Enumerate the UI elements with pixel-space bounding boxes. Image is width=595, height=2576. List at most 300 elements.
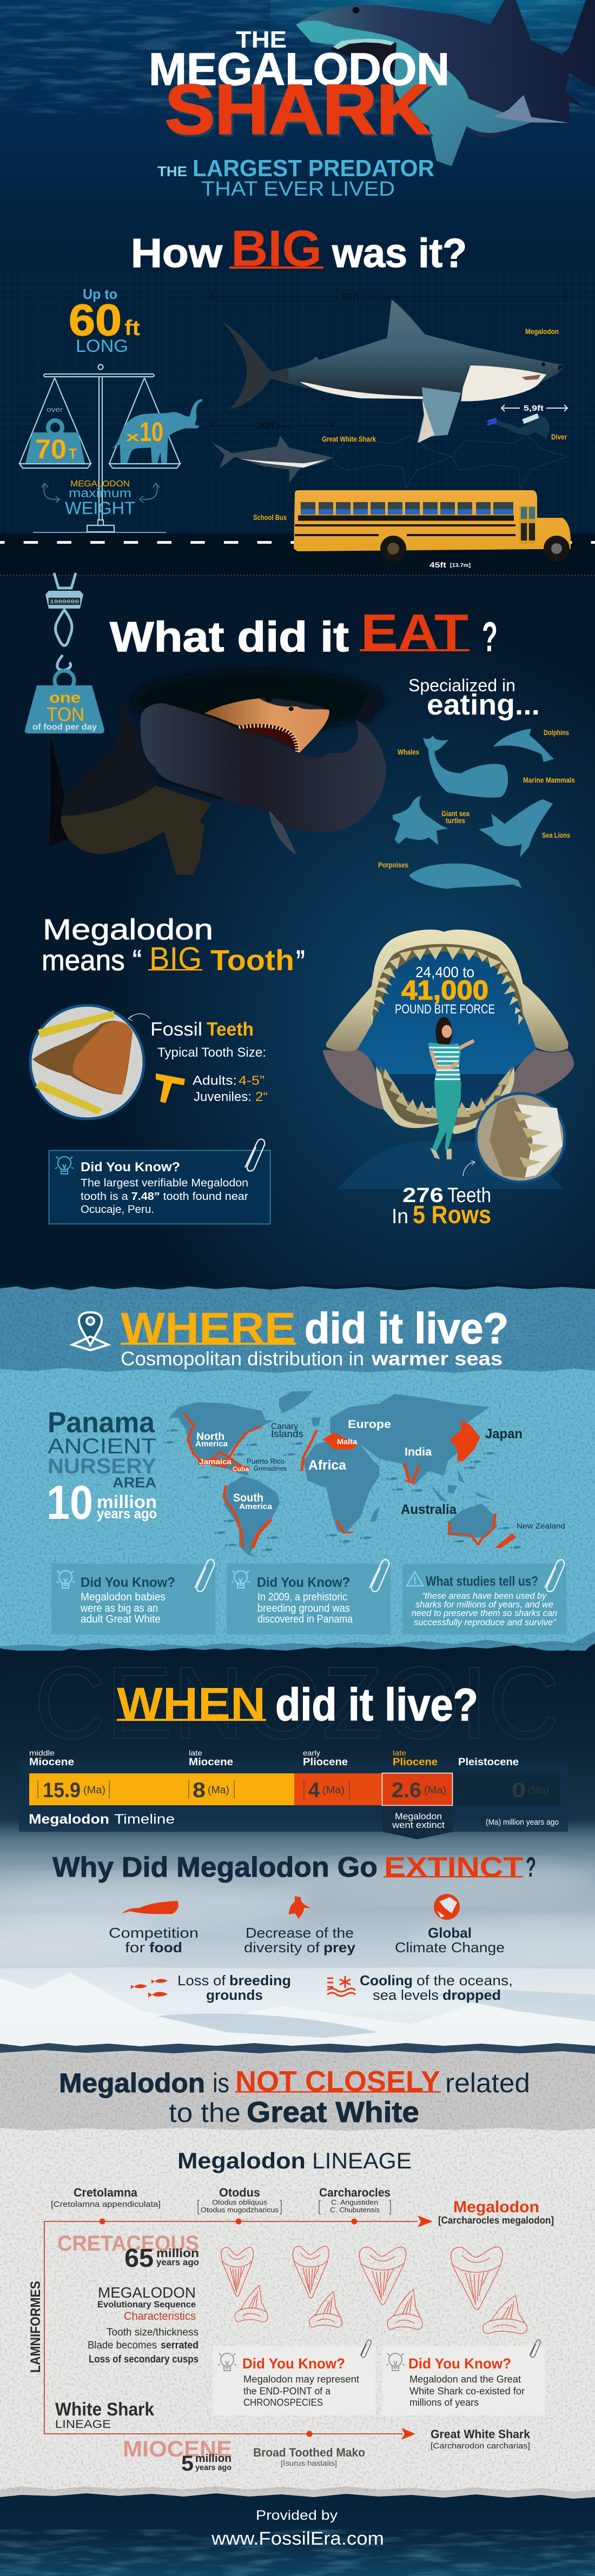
heading: not closely related: to the: [169, 2098, 241, 2128]
text: lineage species: Great White Shark: [431, 2427, 531, 2441]
text: panama ancient nursery area: AREA: [113, 1474, 156, 1491]
item: decrease of prey: diversity of: [244, 1939, 320, 1956]
item: loss of breeding grounds: Loss of: [177, 1972, 226, 1988]
text: megalodon maximum weight: maximum: [69, 486, 131, 500]
measure: 20ft arrow: [6m]: [276, 424, 290, 430]
icon: lightbulb: [386, 2353, 405, 2371]
callout: panama breeding ground: discovered in Panama: [257, 1613, 353, 1625]
text: lineage species: Carcharocles: [319, 2186, 391, 2199]
chart: megalodon timeline: Timeline: [114, 1812, 175, 1827]
icon: elephant x10: x: [126, 430, 140, 444]
heading: why extinct: Why Did Megalodon Go: [52, 1852, 378, 1883]
text: evolutionary sequence characteristics: Loss of secondary cusps: [89, 2354, 199, 2365]
callout: chronospecies: Did You Know?: [242, 2355, 345, 2372]
icon: lightbulb: [55, 1157, 74, 1174]
labels: size comparison: [253, 327, 567, 522]
heading: where did it live: Cosmopolitan distribution in: [121, 1347, 364, 1370]
callout: went extinct flag: Megalodon: [395, 1811, 442, 1821]
callout: chronospecies: Megalodon may represent: [243, 2374, 359, 2385]
text: panama ancient nursery area: [47, 1406, 157, 1529]
labels: map locations: America: [195, 1439, 228, 1449]
heading: how big: [131, 220, 467, 277]
text: cretaceous 65 million years ago: million: [156, 2246, 199, 2260]
panel: where section torn paper: [0, 1283, 595, 1655]
heading: not closely related: Great White: [247, 2096, 419, 2128]
icon: paper clip: [545, 1560, 564, 1592]
heading: megalodon lineage: Megalodon: [177, 2148, 306, 2173]
text: evolutionary sequence characteristics: Evolutionary Sequence: [97, 2299, 196, 2310]
text: tooth sizes: Juveniles:: [194, 1090, 252, 1104]
lower gums and teeth: [380, 1065, 513, 1126]
ghost text: late miocene: LATE MIOCENE: [49, 1290, 546, 1350]
text: evolutionary sequence characteristics: Characteristics: [124, 2310, 196, 2323]
text: lineage species: Cretolamna: [74, 2186, 138, 2199]
item: cooling of the oceans: of the oceans,: [416, 1972, 513, 1988]
item: competition for food: Competition: [109, 1925, 199, 1941]
icon: arrows around weight: [42, 483, 160, 503]
text: miocene 5 million years ago: MIOCENE: [123, 2436, 232, 2461]
measure: 60ft arrow: 60ft: [341, 291, 359, 302]
photo: rows of teeth in circle: [476, 1093, 565, 1182]
photo: fossil tooth in circle: [30, 1005, 144, 1119]
item: global climate change: Climate Change: [395, 1939, 505, 1956]
values: (Ma): [527, 1785, 549, 1796]
heading: how big: BIG: [231, 220, 322, 277]
text: megalodon maximum weight: [65, 479, 135, 518]
text: fossil teeth: Typical Tooth Size:: [157, 1045, 266, 1060]
icon: paper clip: [245, 1139, 265, 1171]
text: 276 teeth in 5 rows: 276: [402, 1184, 444, 1207]
text: white shark lineage: White Shark: [55, 2399, 154, 2420]
stat: up to 60ft long: ft: [124, 316, 140, 340]
measure: 20ft arrow: 20ft: [256, 421, 274, 431]
callout: chronospecies: [213, 2340, 375, 2415]
icon: warning triangle: [407, 1572, 423, 1586]
illustration: megalodon biting sperm whale: [49, 670, 386, 875]
icon: elephant x10: 10: [140, 417, 163, 447]
callout: panama breeding ground: Did You Know?: [257, 1575, 350, 1590]
labels: map locations: Japan: [485, 1426, 523, 1442]
labels: prey names: Sea Lions: [542, 831, 570, 839]
heading: when did it live: did it live?: [275, 1679, 478, 1730]
text: lineage species: [Carcharodon carcharias]: [431, 2441, 530, 2451]
text: lineage species: [Cretolamna appendiculata]: [51, 2200, 161, 2209]
heading: what did it eat: EAT: [361, 604, 468, 660]
heading: megalodon means big tooth: BIG: [149, 941, 202, 976]
icon: balance scale with weight and elephant: over: [47, 405, 63, 413]
text: cretaceous 65 million years ago: 65: [124, 2244, 154, 2273]
stat: up to 60ft long: LONG: [76, 336, 128, 356]
heading: what did it eat: [110, 604, 498, 660]
text: panama ancient nursery area: million: [97, 1492, 157, 1512]
measure: 60ft arrow: [210, 291, 568, 302]
text: evolutionary sequence characteristics: Blade becomes: [88, 2340, 157, 2351]
heading: megalodon means big tooth: Tooth: [210, 944, 294, 977]
text: tooth sizes: 2“: [255, 1090, 268, 1104]
label: lamniformes: LAMNIFORMES: [28, 2281, 43, 2373]
callout: did you know tooth record: Did You Know?: [81, 1160, 180, 1174]
panel: diet and teeth background: [0, 575, 595, 1289]
text: tooth sizes: Adults:: [193, 1073, 237, 1088]
item: cooling of the oceans: dropped: [442, 1987, 501, 2003]
text: evolutionary sequence characteristics: MEGALODON: [98, 2284, 196, 2301]
subtitle: [157, 155, 434, 201]
labels: epochs: Pleistocene: [458, 1757, 519, 1768]
title: SHARK: [165, 70, 431, 149]
values: (Ma): [83, 1785, 105, 1796]
icon: location pin: [72, 1312, 108, 1350]
person: [428, 1017, 474, 1159]
lower jaw bone: [376, 1066, 514, 1134]
text: 276 teeth in 5 rows: 5 Rows: [413, 1200, 491, 1229]
text: evolutionary sequence characteristics: [88, 2284, 199, 2365]
text: lineage species: Broad Toothed Mako: [253, 2446, 365, 2459]
icon: porpoise: [409, 864, 522, 889]
text: lineage species: [51, 2186, 554, 2467]
labels: map locations: Canary: [271, 1422, 298, 1431]
values: (Ma): [424, 1785, 446, 1796]
text: 276 teeth in 5 rows: Teeth: [447, 1184, 491, 1207]
measure: diver 5.9ft: 5,9ft: [524, 404, 544, 413]
subtitle: THE: [157, 163, 187, 179]
callout: what studies tell us: sharks for millions of years, and we: [415, 1599, 553, 1610]
text: fossil teeth: Fossil: [150, 1019, 202, 1040]
labels: map locations: Islands: [271, 1429, 303, 1439]
labels: prey names: Porpoises: [378, 860, 408, 869]
labels: map locations: Cuba: [233, 1465, 249, 1473]
callout: went extinct flag: went extinct: [392, 1820, 445, 1830]
labels: map locations: Grenadines: [254, 1465, 287, 1472]
illustration: tooth evolution outlines: [221, 2246, 527, 2334]
road dashes: [0, 541, 595, 544]
text: fossil teeth: [128, 1014, 266, 1060]
callout: what studies tell us: “these areas have been used by: [422, 1591, 547, 1601]
lower jaw sides: [323, 1050, 391, 1110]
labels: size comparison: Megalodon: [525, 327, 559, 336]
values: 15.9: [43, 1779, 81, 1802]
heading: megalodon means big tooth: ”: [295, 944, 306, 977]
upper gums and teeth: [371, 944, 525, 1025]
item: global climate change: [395, 1894, 505, 1956]
measure: 60ft arrow: [18m]: [363, 295, 379, 301]
stat: up to 60ft long: [69, 286, 140, 356]
labels: epochs: Pliocene: [303, 1757, 348, 1768]
heading: where did it live: did it live?: [305, 1304, 508, 1352]
icon: t-shaped ruler: [156, 1073, 185, 1103]
icon: one ton weight: one: [49, 689, 81, 706]
labels: size comparison: School Bus: [253, 513, 287, 522]
icon: hanging scale: [45, 573, 83, 670]
heading: megalodon lineage: [177, 2148, 412, 2173]
callout: did you know tooth record: The largest verifiable Megalodon: [81, 1177, 248, 1189]
text: miocene 5 million years ago: 5: [181, 2452, 194, 2475]
labels: map locations: South: [233, 1492, 263, 1504]
icon: one ton weight: [25, 671, 104, 733]
panel: hero and size background: [0, 0, 595, 575]
icon: hanging scale: 1000000: [50, 599, 79, 605]
text: bite force: 24,400 to: [415, 964, 474, 980]
callout: panama breeding ground: [227, 1560, 391, 1634]
text: tooth sizes: 4-5”: [239, 1073, 265, 1088]
callout: co-existed: Megalodon and the Great: [409, 2374, 521, 2385]
labels: epochs: Miocene: [189, 1757, 233, 1768]
labels: prey names: turtles: [446, 816, 465, 825]
text: miocene 5 million years ago: million: [195, 2453, 232, 2465]
text: miocene 5 million years ago: years ago: [195, 2463, 232, 2472]
measure: bus 45ft: [13.7m]: [450, 563, 471, 569]
labels: prey names: Dolphins: [544, 728, 569, 737]
labels: map locations: India: [405, 1446, 432, 1458]
text: lineage species: [Isurus hastalis]: [281, 2459, 337, 2467]
labels: epochs: middle: [29, 1749, 55, 1757]
icon: turtle: [289, 1896, 310, 1919]
text: specialized in eating: Specialized in: [408, 676, 515, 695]
item: loss of breeding grounds: [131, 1972, 291, 2003]
icon: paper clip: [195, 1560, 214, 1592]
callout: co-existed: [382, 2340, 545, 2415]
heading: not closely related: related: [445, 2068, 530, 2098]
labels: prey names: [378, 728, 575, 869]
callout: chronospecies: CHRONOSPECIES: [243, 2397, 323, 2408]
callout: megalodon babies: [51, 1560, 215, 1634]
item: cooling of the oceans: [327, 1972, 513, 2003]
icon: whale: [423, 735, 508, 798]
text: evolutionary sequence characteristics: serrated: [161, 2340, 199, 2351]
heading: what did it eat: What did it: [110, 613, 349, 660]
illustration: great white shark small: [211, 436, 333, 483]
chart: lineage lines: [44, 2215, 433, 2440]
text: lineage species: [Carcharocles megalodon]: [438, 2215, 554, 2226]
icon: three fish: [131, 1979, 168, 1998]
icon: paper clip: [369, 1560, 389, 1592]
text: miocene 5 million years ago: [123, 2436, 232, 2475]
text: 276 teeth in 5 rows: [392, 1160, 491, 1229]
ghost text: cenozoic: CENOZOIC: [34, 1646, 560, 1760]
callout: megalodon babies: were as big as an: [80, 1603, 158, 1614]
callout: what studies tell us: successfully reproduce and survive": [414, 1617, 557, 1627]
illustration: megalodon swimming at top right: [296, 0, 595, 166]
text: lineage species: Otodus obliquus: [212, 2198, 268, 2206]
labels: prey names: Whales: [398, 748, 419, 756]
callout: what studies tell us: need to preserve them so sharks can: [412, 1608, 557, 1618]
callout: panama breeding ground: breeding ground was: [257, 1603, 350, 1614]
text: lineage species: Megalodon: [453, 2198, 539, 2216]
heading: how big: was it?: [332, 230, 467, 276]
bars: [29, 1773, 560, 1805]
text: bite force: 41,000: [401, 975, 488, 1005]
labels: map locations: Europe: [348, 1418, 391, 1431]
title: [149, 26, 449, 151]
text: white shark lineage: [55, 2399, 154, 2431]
text: panama ancient nursery area: Panama: [48, 1406, 155, 1439]
measure: bus 45ft: [294, 560, 567, 569]
callout: what studies tell us: [402, 1560, 566, 1634]
item: cooling of the oceans: Cooling: [360, 1972, 413, 1988]
callout: went extinct flag: [382, 1806, 453, 1839]
heading: megalodon means big tooth: means “: [42, 944, 142, 977]
text: panama ancient nursery area: ANCIENT: [48, 1434, 156, 1458]
illustration: diver: [487, 415, 550, 439]
reflection of jaws: [337, 1141, 563, 1189]
text: panama ancient nursery area: years ago: [97, 1505, 157, 1521]
values: 8: [193, 1779, 206, 1802]
labels: map locations: New Zealand: [517, 1521, 565, 1530]
heading: why extinct: [52, 1852, 536, 1883]
panel: footer water: [0, 2493, 595, 2576]
labels: size comparison: Great White Shark: [322, 435, 376, 443]
values: (Ma): [322, 1785, 345, 1796]
text: evolutionary sequence characteristics: Tooth size/thickness: [107, 2327, 199, 2338]
heading: megalodon means big tooth: Megalodon: [43, 913, 213, 946]
heading: not closely related: is: [213, 2068, 229, 2098]
item: decrease of prey: Decrease of the: [246, 1925, 354, 1941]
text: panama ancient nursery area: NURSERY: [48, 1454, 156, 1478]
values: 4: [308, 1779, 320, 1802]
icon: lightbulb: [56, 1571, 75, 1588]
text: lineage species: Otodus mugodzharicus: [201, 2206, 279, 2214]
callout: what studies tell us: What studies tell us?: [426, 1574, 538, 1589]
item: global climate change: Global: [428, 1925, 472, 1941]
callout: megalodon babies: adult Great White: [81, 1613, 161, 1625]
illustration: megalodon jaws with person: [323, 930, 574, 1189]
item: competition for food: [109, 1901, 199, 1956]
text: cretaceous 65 million years ago: CRETACEOUS: [57, 2232, 199, 2255]
heading: not closely related: Megalodon: [59, 2068, 205, 2098]
text: tooth sizes: [193, 1073, 268, 1104]
text: white shark lineage: LINEAGE: [55, 2418, 111, 2431]
text: megalodon maximum weight: WEIGHT: [65, 498, 135, 518]
values: [38, 1779, 549, 1802]
measure: 20ft arrow: [210, 421, 334, 431]
heading: megalodon lineage: LINEAGE: [312, 2148, 412, 2173]
labels: size comparison: Diver: [551, 432, 567, 441]
icon: elephant x10: [111, 399, 202, 463]
heading: why extinct: ?: [526, 1852, 536, 1883]
labels: map locations: North: [196, 1431, 224, 1443]
illustration: school bus: [294, 490, 571, 562]
heading: where did it live: [121, 1304, 508, 1370]
chart: megalodon timeline: Megalodon: [29, 1812, 109, 1827]
text: cretaceous 65 million years ago: [57, 2232, 199, 2273]
heading: when did it live: [117, 1678, 478, 1730]
labels: epochs: early: [303, 1749, 320, 1757]
map: world distribution: [163, 1391, 565, 1558]
footer: provided by: www.FossilEra.com: [211, 2528, 384, 2549]
icon: 70 ton weight: [25, 421, 85, 464]
icon: balance scale with weight and elephant: [19, 364, 202, 532]
item: competition for food: food: [149, 1939, 182, 1956]
heading: not closely related: NOT CLOSELY: [235, 2065, 440, 2098]
callout: did you know tooth record: Ocucaje, Peru.: [81, 1204, 154, 1216]
text: lineage species: Otodus: [219, 2186, 260, 2199]
callout: co-existed: millions of years: [409, 2397, 479, 2408]
heading: where did it live: warmer seas: [371, 1347, 503, 1370]
labels: epochs: late: [189, 1749, 202, 1757]
labels: map locations: America: [239, 1502, 273, 1511]
text: panama ancient nursery area: 10: [47, 1476, 93, 1529]
title: SHARK: [167, 72, 433, 151]
item: cooling of the oceans: sea levels: [373, 1987, 439, 2003]
heading: when did it live: WHEN: [117, 1678, 266, 1729]
labels: map locations: Africa: [308, 1458, 347, 1473]
item: competition for food: for: [125, 1939, 145, 1956]
stat: up to 60ft long: 60: [69, 296, 122, 345]
illustration: faint shark outlines: [333, 435, 567, 489]
callout: co-existed: Did You Know?: [408, 2355, 511, 2372]
panel: lineage paper section: [0, 2043, 595, 2502]
text: bite force: POUND BITE FORCE: [395, 1002, 495, 1017]
labels: map locations: Australia: [401, 1502, 457, 1517]
icon: lightbulb: [232, 1571, 250, 1588]
text: specialized in eating: eating...: [427, 689, 540, 721]
icon: 70 ton weight: 70: [35, 434, 67, 464]
labels: epochs: [29, 1749, 519, 1768]
icon: 70 ton weight: T: [69, 445, 77, 462]
icon: paper clip: [530, 2340, 540, 2358]
chart: megalodon timeline: [19, 1749, 568, 1839]
icon: lightbulb: [218, 2353, 236, 2371]
footer: provided by: Provided by: [256, 2508, 338, 2523]
illustration: megalodon side view: [222, 299, 565, 443]
text: bite force: [395, 964, 495, 1017]
title: MEGALODON: [149, 44, 449, 95]
callout: megalodon babies: Megalodon babies: [81, 1591, 166, 1603]
icon: turtle: [393, 796, 448, 845]
panel: when section and sky background: [0, 1646, 595, 1975]
item: decrease of prey: prey: [323, 1939, 356, 1956]
text: lineage species: C. Angustiden: [331, 2198, 378, 2206]
icon: paper clip: [360, 2340, 371, 2358]
callout: did you know tooth record: [49, 1139, 270, 1224]
text: specialized in eating: [408, 676, 540, 721]
callout: did you know tooth record: tooth is a 7.48” tooth found near: [81, 1191, 248, 1203]
labels: epochs: Pliocene: [393, 1757, 438, 1768]
labels: epochs: late: [393, 1749, 406, 1757]
chart: megalodon timeline: (Ma) million years ago: [486, 1818, 559, 1827]
heading: not closely related: [59, 2065, 530, 2128]
icon: snow and waves: [327, 1976, 355, 1996]
icon: one ton weight: TON: [47, 703, 84, 725]
callout: co-existed: White Shark co-existed for: [409, 2386, 525, 2397]
callout: panama breeding ground: In 2009, a prehistoric: [257, 1591, 347, 1603]
upper jaw bone: [326, 930, 568, 1052]
panel: ice landscape: [0, 1967, 595, 2048]
text: lineage species: C. Chubutensis: [330, 2206, 380, 2214]
measure: diver 5.9ft: [501, 404, 567, 413]
text: 276 teeth in 5 rows: In: [392, 1205, 408, 1228]
callout: chronospecies: the END-POINT of a: [243, 2386, 331, 2397]
values: 2.6: [392, 1779, 421, 1802]
footer: provided by: [211, 2508, 384, 2549]
callout: megalodon babies: Did You Know?: [81, 1575, 175, 1590]
labels: map locations: [195, 1418, 565, 1530]
measure: bus 45ft: 45ft: [429, 560, 446, 569]
text: cretaceous 65 million years ago: years ago: [156, 2257, 199, 2267]
item: loss of breeding grounds: breeding: [229, 1972, 291, 1988]
values: 0: [512, 1779, 526, 1802]
heading: why extinct: EXTINCT: [384, 1852, 523, 1883]
icon: sea lion: [479, 799, 553, 858]
icon: globe: [434, 1894, 460, 1920]
icon: whale: [122, 1901, 178, 1914]
icon: dolphin: [493, 729, 554, 762]
heading: what did it eat: ?: [482, 613, 498, 660]
stat: up to 60ft long: Up to: [83, 286, 117, 302]
values: (Ma): [208, 1785, 229, 1796]
icons: prey silhouettes: [393, 729, 554, 889]
heading: megalodon means big tooth: [42, 913, 306, 977]
icon: one ton weight: of food per day: [32, 723, 97, 732]
